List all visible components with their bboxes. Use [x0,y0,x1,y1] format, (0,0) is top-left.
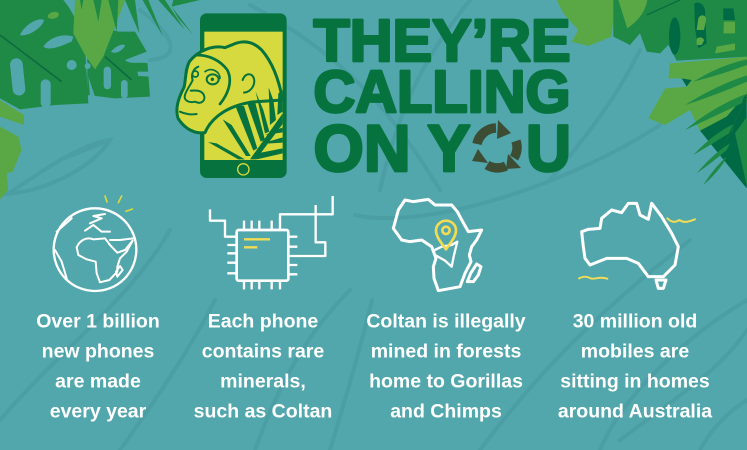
text: minerals [194,310,332,422]
icon: globe [54,196,136,291]
text: phones: new phones [42,340,154,362]
gorilla [177,42,283,133]
text: coltan: home to Gorillas [369,370,523,392]
text: phones [36,310,160,422]
left jungle leaves [0,0,200,199]
text: minerals: minerals, [220,370,306,392]
text: coltan: Coltan is illegally [366,310,526,332]
water ripples [579,218,695,279]
text: Australia: sitting in homes [560,370,710,392]
text: Australia: mobiles are [581,340,689,362]
text: phones: are made [55,370,141,392]
text: Australia: 30 million old [573,310,697,332]
palm leaf on phone screen [208,87,283,159]
text: coltan: mined in forests [371,340,521,362]
title: CALLING [314,58,570,125]
phone body [200,13,287,178]
title: U [526,111,571,185]
text: minerals: Each phone [208,310,318,332]
text: coltan: and Chimps [390,400,502,422]
title: THEY’RE [314,7,570,74]
title: ON Y [314,111,470,185]
text: minerals: such as Coltan [194,400,332,422]
title [314,7,571,185]
right jungle leaves [557,0,747,188]
text: minerals: contains rare [202,340,324,362]
text: Australia [558,310,712,422]
icon: Africa map with pin [393,199,482,291]
location pin [436,221,456,249]
text: phones: every year [50,400,147,422]
globe sparkle [105,196,132,211]
icon: recycle arrows [472,120,521,169]
phone screen [204,32,283,160]
phone with gorilla logo [177,13,287,178]
chip accents [244,239,270,247]
icon: Australia map [579,203,695,288]
text: coltan [366,310,526,422]
text: Australia: around Australia [558,400,712,422]
text: phones: Over 1 billion [36,310,160,332]
home button [238,164,249,175]
icon: microchip [210,196,333,289]
